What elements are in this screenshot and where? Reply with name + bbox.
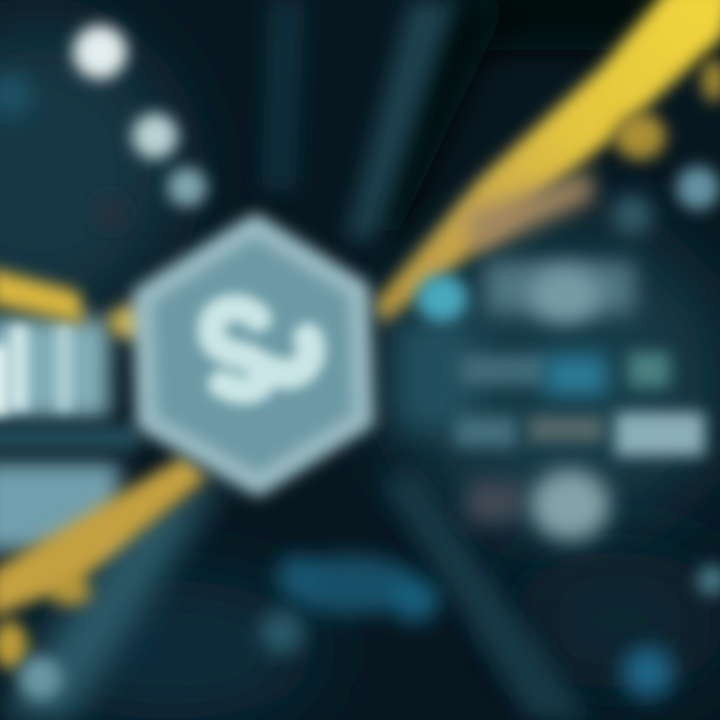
icon: hexagon badge	[142, 224, 364, 486]
left light panel	[0, 318, 230, 720]
upper-right gold streak	[372, 0, 720, 325]
right data rows	[395, 262, 705, 541]
left gold streak	[0, 268, 152, 339]
icon: S symbol	[211, 308, 310, 391]
hexagon body	[142, 224, 364, 486]
lower-left gold streak	[0, 422, 253, 669]
lower blue glow	[276, 555, 439, 622]
